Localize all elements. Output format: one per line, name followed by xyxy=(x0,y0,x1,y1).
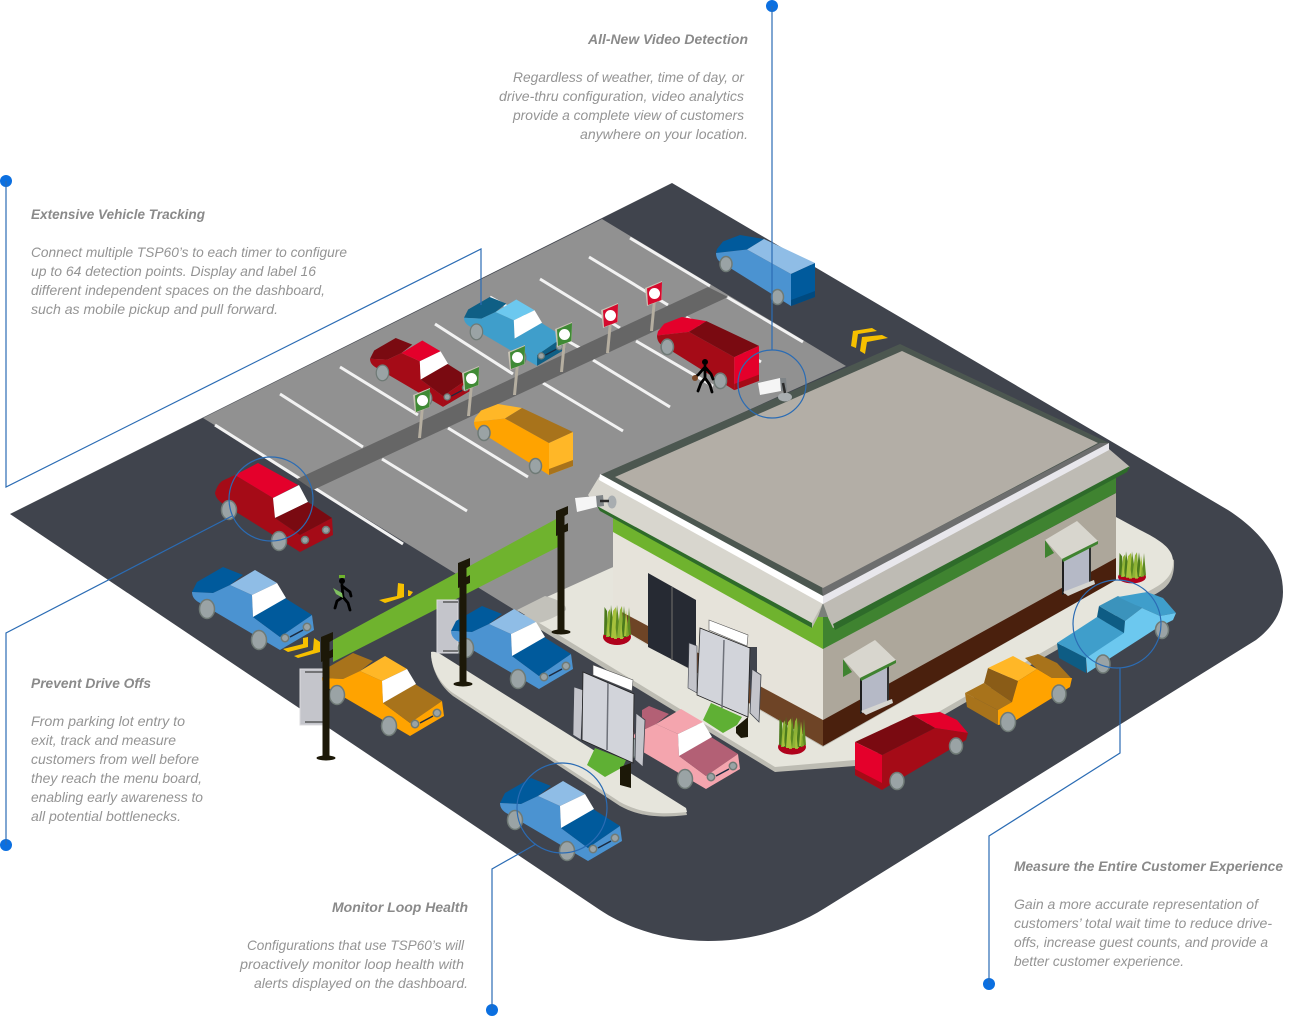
chevrons: back road xyxy=(851,328,888,354)
text: All-New Video Detection: anywhere on your location. xyxy=(580,126,748,142)
text: Extensive Vehicle Tracking: up to 64 detection points. Display and label 16 xyxy=(31,263,316,279)
chevrons: near lane xyxy=(283,637,320,658)
text: Prevent Drive Offs: exit, track and measure xyxy=(31,732,176,748)
text: Measure the Entire Customer Experience: customers’ total wait time to reduce drive- xyxy=(1014,915,1272,931)
text: Measure the Entire Customer Experience: better customer experience. xyxy=(1014,953,1184,969)
text: Extensive Vehicle Tracking xyxy=(31,206,347,317)
van: red parked xyxy=(657,317,759,390)
text: Measure the Entire Customer Experience xyxy=(1014,858,1283,969)
left green band xyxy=(613,517,823,649)
green gantry beam xyxy=(333,518,558,662)
clearance bar: lower xyxy=(300,669,323,725)
text: Prevent Drive Offs: Prevent Drive Offs xyxy=(31,675,151,691)
drive-thru window: rear xyxy=(1045,521,1098,596)
van: red on side road xyxy=(855,712,968,790)
callout: video detection xyxy=(738,0,806,418)
building xyxy=(588,344,1130,746)
planter: entrance xyxy=(603,605,631,645)
sidewalk curb shadow xyxy=(518,525,1174,772)
text: Prevent Drive Offs xyxy=(31,675,203,824)
camera: roof corner xyxy=(758,378,792,402)
text: Extensive Vehicle Tracking: such as mobile pickup and pull forward. xyxy=(31,301,278,317)
text: Monitor Loop Health: Configurations that use TSP60’s will xyxy=(247,937,465,953)
text: Monitor Loop Health: alerts displayed on the dashboard. xyxy=(254,975,468,991)
planter: rear xyxy=(1118,551,1146,583)
callout: vehicle tracking xyxy=(0,175,481,487)
car: light blue parked xyxy=(464,297,565,366)
car: blue monitored xyxy=(500,778,622,861)
car: orange in queue xyxy=(322,653,444,736)
pedestrian with clipboard xyxy=(333,575,351,610)
white roof trim xyxy=(599,443,1109,604)
van: orange parked xyxy=(474,404,573,475)
text: All-New Video Detection xyxy=(499,31,748,142)
right green band xyxy=(823,477,1116,649)
van: blue on back road xyxy=(716,235,815,306)
planter: corner xyxy=(778,717,806,755)
gantry post: lower xyxy=(316,632,336,760)
asphalt ground xyxy=(10,183,1283,941)
island curb xyxy=(431,652,687,816)
car: blue in lane xyxy=(451,606,573,689)
text: Monitor Loop Health xyxy=(239,899,468,991)
text: Prevent Drive Offs: all potential bottlenecks. xyxy=(31,808,181,824)
car: red parked xyxy=(370,338,471,407)
car: red lead xyxy=(215,463,333,552)
parking lot xyxy=(203,219,846,612)
right wall xyxy=(823,493,1116,720)
text: All-New Video Detection: drive-thru configuration, video analytics xyxy=(499,88,744,104)
left fascia xyxy=(588,477,823,623)
sidewalk xyxy=(518,517,1173,767)
right fascia xyxy=(823,449,1130,626)
text: Prevent Drive Offs: enabling early awareness to xyxy=(31,789,203,805)
text: Prevent Drive Offs: From parking lot entry to xyxy=(31,713,185,729)
fascia under-stripes xyxy=(597,466,1130,630)
text: Measure the Entire Customer Experience: offs, increase guest counts, and provide a xyxy=(1014,934,1268,950)
entrance doors xyxy=(648,573,696,672)
text: Measure the Entire Customer Experience: Measure the Entire Customer Experience xyxy=(1014,858,1283,874)
text: Extensive Vehicle Tracking: Connect multiple TSP60’s to each timer to configure xyxy=(31,244,347,260)
drive-thru window: front xyxy=(843,640,896,715)
callout: loop health xyxy=(486,763,607,1016)
gantry post: middle xyxy=(454,558,472,686)
text: Monitor Loop Health: proactively monitor loop health with xyxy=(239,956,464,972)
text: Prevent Drive Offs: customers from well before xyxy=(31,751,199,767)
parking median strip xyxy=(297,287,728,490)
text: Measure the Entire Customer Experience: Gain a more accurate representation of xyxy=(1014,896,1260,912)
pole shadow on sidewalk xyxy=(517,596,566,623)
parking signs xyxy=(413,281,662,438)
car: orange on side road xyxy=(965,654,1072,732)
camera: building front xyxy=(575,495,616,512)
pedestrian with bag xyxy=(692,359,713,392)
gantry post: upper xyxy=(552,506,570,634)
roof rim xyxy=(600,344,1109,597)
car: light blue at exit xyxy=(1057,592,1176,673)
left wall xyxy=(613,530,823,746)
left brown base xyxy=(620,611,823,746)
parking space lines xyxy=(215,238,803,544)
right dark brown base xyxy=(823,558,1116,746)
menu board: lower xyxy=(573,665,645,788)
callout: customer experience xyxy=(983,580,1161,990)
text: Prevent Drive Offs: they reach the menu board, xyxy=(31,770,202,786)
roof surface xyxy=(615,351,1098,588)
text: Monitor Loop Health: Monitor Loop Health xyxy=(332,899,468,915)
text: All-New Video Detection: All-New Video Detection xyxy=(587,31,748,47)
callout: drive offs xyxy=(0,457,313,851)
text: All-New Video Detection: provide a complete view of customers xyxy=(512,107,744,123)
text: Extensive Vehicle Tracking: Extensive Vehicle Tracking xyxy=(31,206,205,222)
chevrons: near entry xyxy=(379,583,413,603)
text: Extensive Vehicle Tracking: different independent spaces on the dashboard, xyxy=(31,282,325,298)
roof rim gray right edge xyxy=(822,443,1109,597)
car: blue in queue xyxy=(192,567,314,650)
car: pink at menu board xyxy=(618,706,740,789)
text: All-New Video Detection: Regardless of weather, time of day, or xyxy=(513,69,745,85)
menu board: upper xyxy=(688,620,761,738)
clearance bar: upper xyxy=(437,600,458,653)
